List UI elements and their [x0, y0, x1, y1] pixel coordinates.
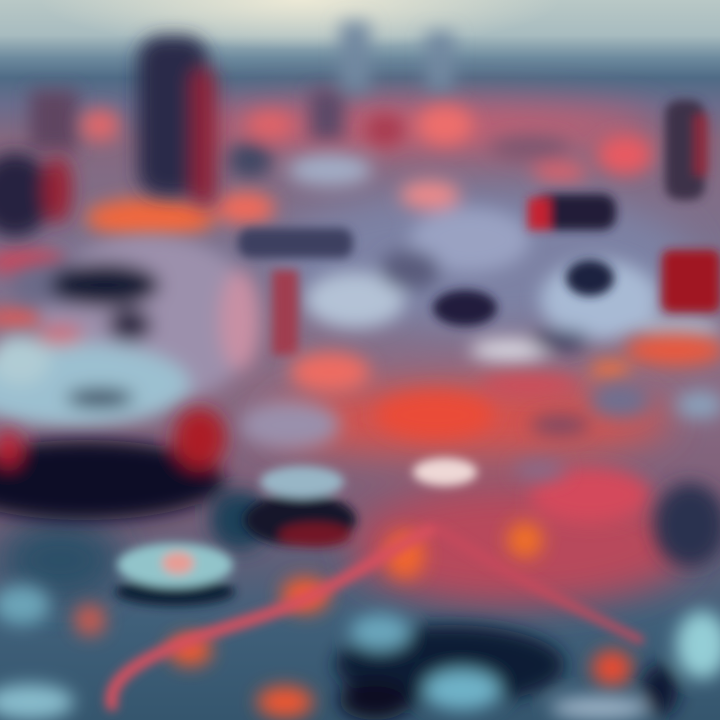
dark band under plaza [0, 408, 270, 550]
curved red road, lower left [111, 530, 640, 705]
red-orange road field [74, 334, 720, 718]
dark mass left [0, 153, 72, 237]
white patch centre [413, 458, 477, 486]
pale round disc with red centre [115, 543, 235, 606]
right side buildings [433, 194, 720, 326]
main tower left [138, 36, 216, 205]
large circular plaza [0, 235, 260, 427]
T-shaped dark structure centre [238, 228, 353, 355]
lower discs and dark pools [0, 585, 720, 720]
orange and red glow, left [0, 192, 275, 326]
large colour field [0, 101, 690, 605]
distant towers [30, 22, 454, 150]
city blocks, upper [80, 105, 720, 362]
dark dome with pale top, centre [244, 466, 356, 547]
grey-blue blocks, mid right [240, 382, 720, 567]
tower right [665, 100, 708, 200]
